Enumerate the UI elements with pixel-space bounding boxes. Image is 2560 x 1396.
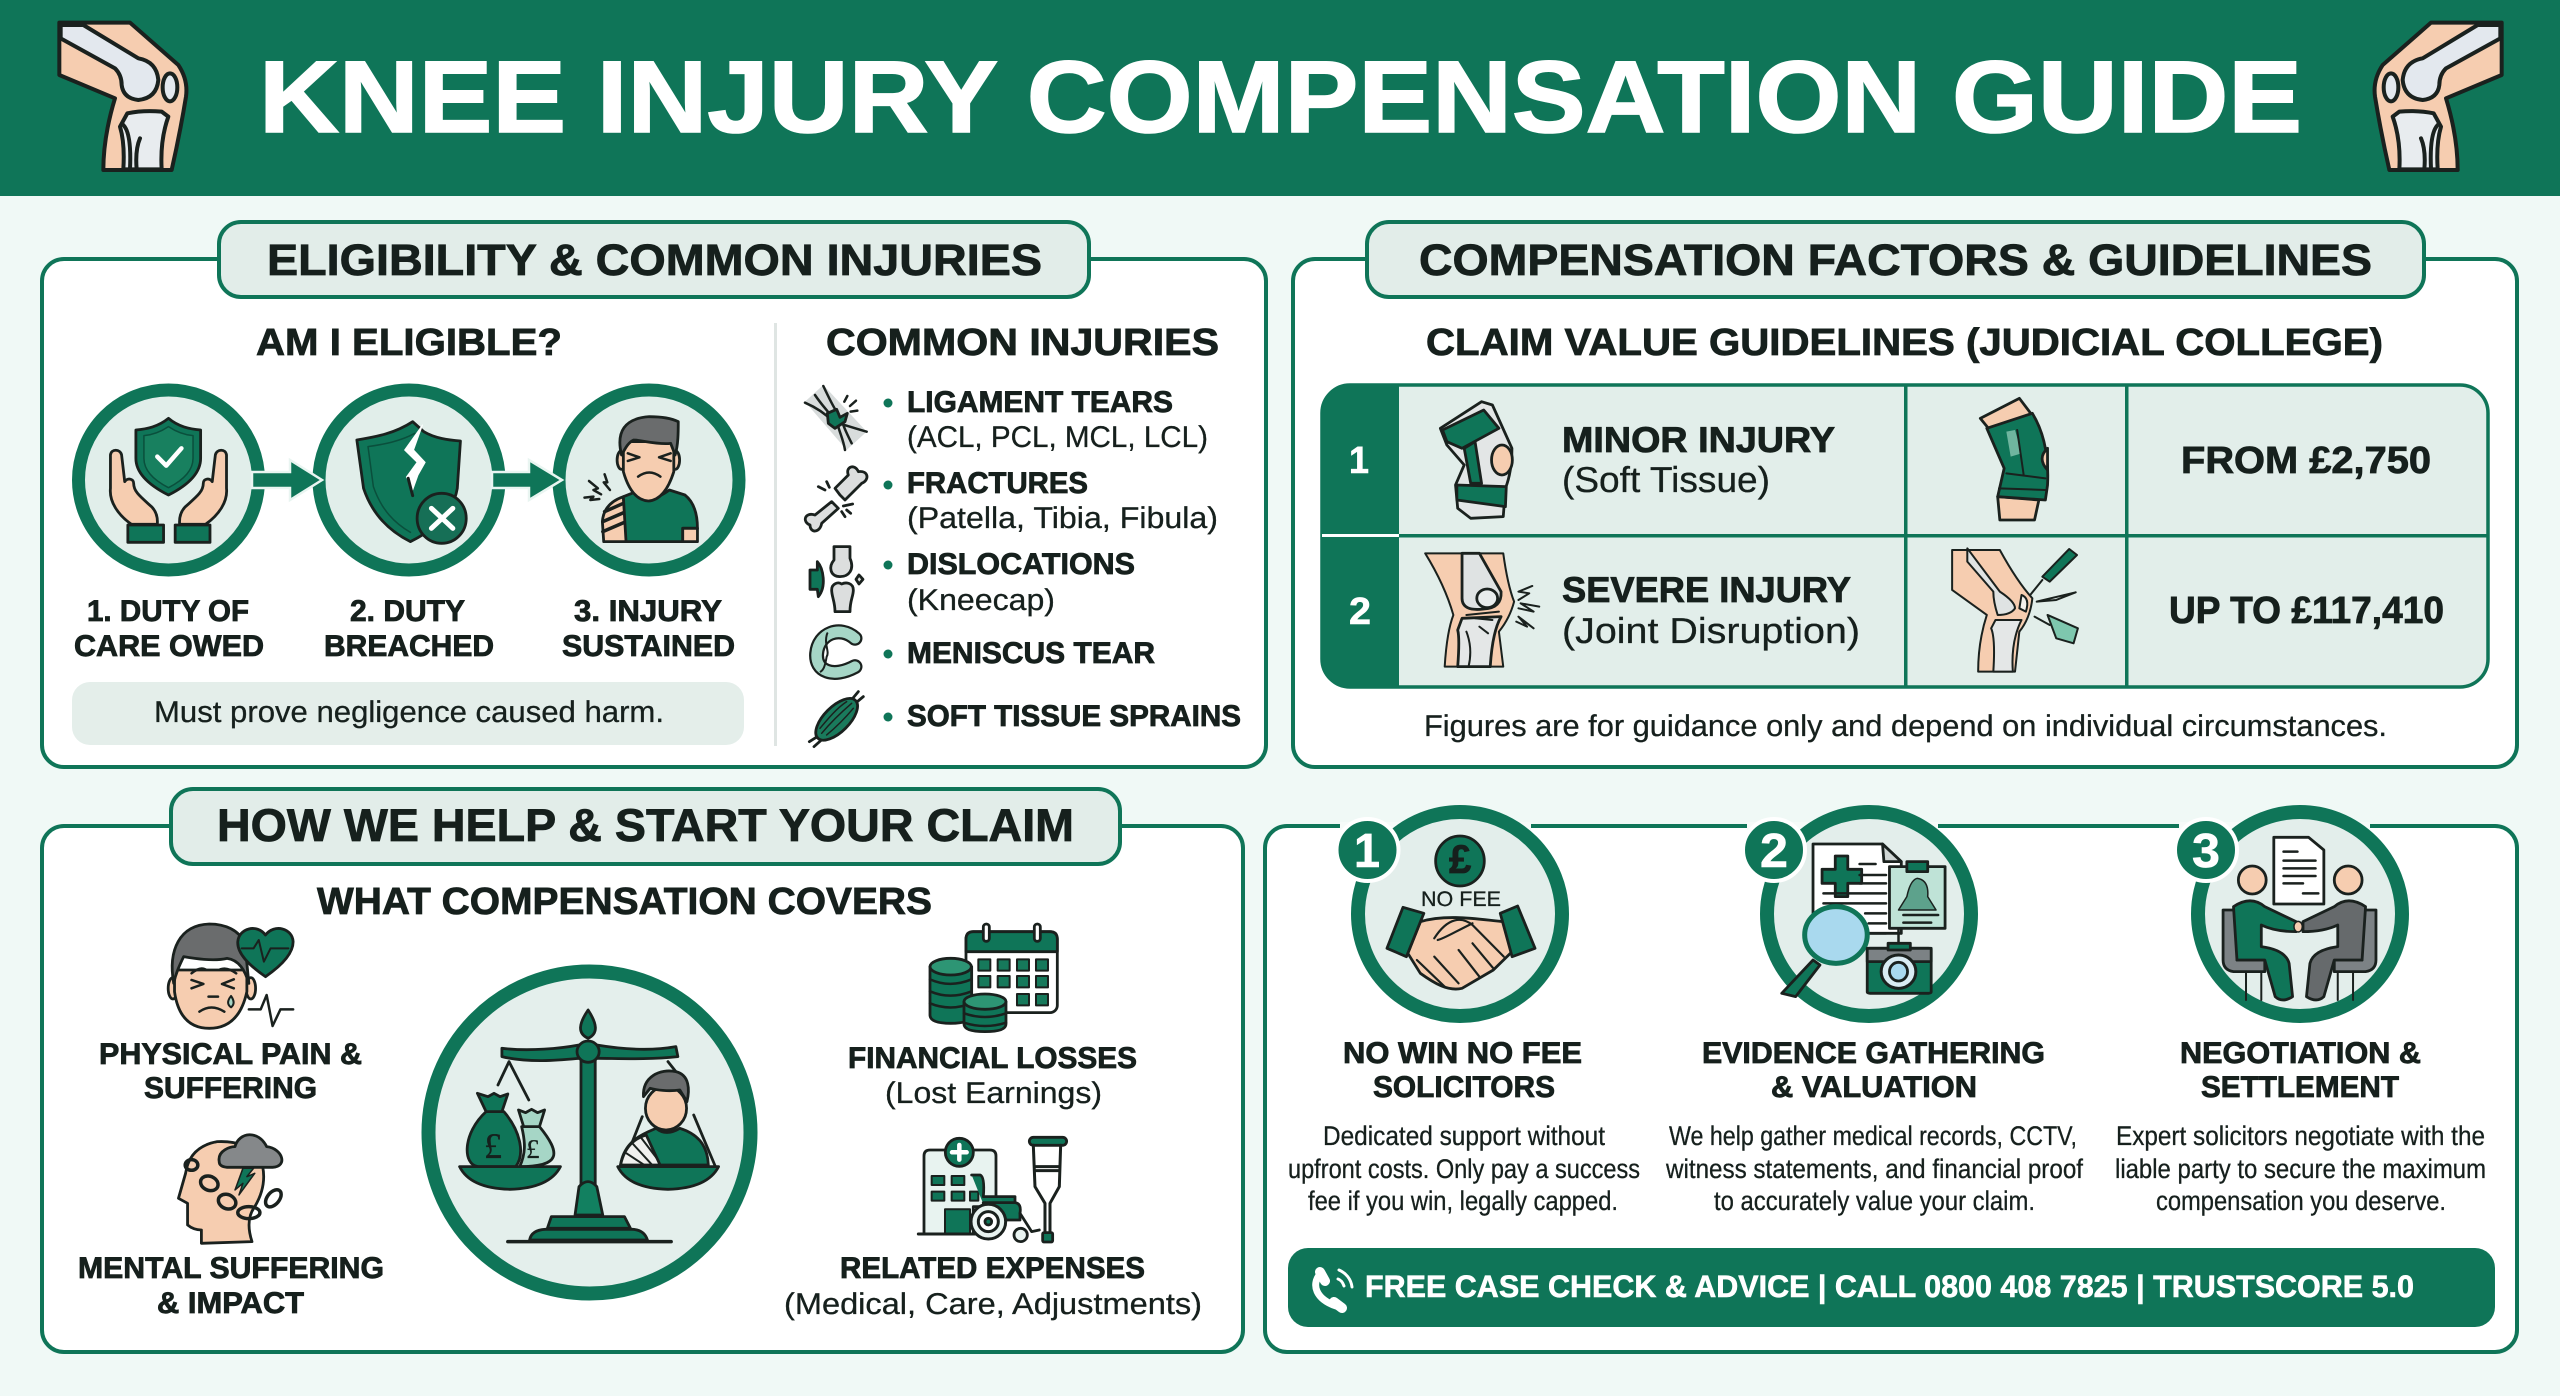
text: pound coin: £ bbox=[1449, 838, 1471, 882]
heading: evidence gathering: EVIDENCE GATHERING bbox=[1702, 1037, 2045, 1070]
icon: face in pain with heart bbox=[168, 924, 293, 1028]
icon: knee joint right bbox=[2375, 23, 2502, 170]
text: step 1 description: upfront costs. Only pay a success bbox=[1288, 1154, 1640, 1184]
heading: negotiation and settlement: SETTLEMENT bbox=[2201, 1071, 2399, 1104]
heading: negotiation and settlement: NEGOTIATION & bbox=[2180, 1037, 2421, 1070]
value: up to 117,410: UP TO £117,410 bbox=[2169, 590, 2444, 632]
panel heading tab bbox=[1367, 222, 2424, 297]
panel heading tab: COMPENSATION FACTORS & GUIDELINES bbox=[1419, 236, 2372, 285]
icon: dislocated kneecap bbox=[810, 547, 863, 612]
step circles and arrows bbox=[78, 390, 739, 570]
text: soft tissue sprains: SOFT TISSUE SPRAINS bbox=[907, 700, 1241, 733]
value: from 2,750: FROM £2,750 bbox=[2181, 440, 2431, 482]
label: related expenses: RELATED EXPENSES bbox=[840, 1252, 1145, 1285]
heading: no win no fee solicitors: NO WIN NO FEE bbox=[1343, 1037, 1582, 1070]
panel heading tab bbox=[219, 222, 1089, 297]
icon: calendar and coins bbox=[930, 924, 1057, 1032]
panel: what compensation covers bbox=[42, 789, 1243, 1352]
label: financial losses: (Lost Earnings) bbox=[885, 1077, 1102, 1110]
panel: eligibility and common injuries bbox=[42, 222, 1266, 767]
label: step 1: 1. DUTY OF bbox=[87, 595, 249, 628]
step circle bbox=[1358, 812, 1562, 1016]
text: severe injury bbox=[1562, 569, 1860, 651]
title: KNEE INJURY COMPENSATION GUIDE bbox=[259, 40, 2302, 154]
callout: negligence note: Must prove negligence caused harm. bbox=[154, 696, 664, 729]
heading: claim value guidelines: CLAIM VALUE GUIDELINES (JUDICIAL COLLEGE) bbox=[1426, 322, 2383, 364]
label: step 2: 2. DUTY bbox=[350, 595, 465, 628]
label: step 3: SUSTAINED bbox=[562, 630, 735, 663]
arrow: step 1 to 2 bbox=[252, 460, 322, 500]
call to action bar bbox=[1288, 1248, 2495, 1327]
text: minor injury bbox=[1562, 419, 1835, 500]
step circle bbox=[1767, 812, 1971, 1016]
icon: knee joint left bbox=[59, 23, 186, 170]
label: step 2 bbox=[324, 595, 494, 663]
number badge 3: 3 bbox=[2192, 825, 2220, 878]
pound sign small: £ bbox=[526, 1134, 540, 1164]
icon: muscle bbox=[809, 691, 864, 747]
label: related expenses bbox=[784, 1252, 1202, 1321]
label: mental suffering: & IMPACT bbox=[157, 1287, 304, 1320]
heading: what compensation covers: WHAT COMPENSATION COVERS bbox=[317, 881, 932, 923]
icon: phone bbox=[1316, 1270, 1352, 1308]
icon: documents magnifier camera bbox=[1782, 844, 1945, 997]
text: minor injury: (Soft Tissue) bbox=[1562, 459, 1770, 500]
icon: hospital wheelchair crutch bbox=[918, 1137, 1067, 1242]
panel heading tab: HOW WE HELP & START YOUR CLAIM bbox=[217, 799, 1074, 851]
text: severe injury: (Joint Disruption) bbox=[1562, 610, 1860, 651]
heading: no win no fee solicitors: SOLICITORS bbox=[1373, 1071, 1555, 1104]
label: physical pain bbox=[99, 1038, 362, 1105]
panel: start your claim steps bbox=[1265, 812, 2517, 1352]
label: mental suffering: MENTAL SUFFERING bbox=[78, 1252, 384, 1285]
arrow: step 2 to 3 bbox=[492, 460, 562, 500]
heading: negotiation and settlement bbox=[2180, 1037, 2421, 1104]
text: step 3 description bbox=[2115, 1121, 2486, 1216]
label: physical pain: SUFFERING bbox=[144, 1072, 317, 1105]
label: step 1 bbox=[74, 595, 264, 663]
icon: handshake and coin bbox=[1387, 836, 1535, 989]
text: step 1 description bbox=[1288, 1121, 1640, 1216]
text: fractures: (Patella, Tibia, Fibula) bbox=[907, 502, 1218, 535]
heading: common injuries: COMMON INJURIES bbox=[826, 322, 1219, 364]
label: financial losses: FINANCIAL LOSSES bbox=[848, 1042, 1137, 1075]
table: claim values bbox=[1322, 385, 2488, 687]
label: related expenses: (Medical, Care, Adjustments) bbox=[784, 1288, 1202, 1321]
icon: head with chain and storm cloud bbox=[178, 1135, 284, 1243]
callout: negligence note bbox=[72, 682, 744, 745]
pound sign large: £ bbox=[484, 1126, 502, 1166]
icon: broken shield bbox=[357, 422, 466, 543]
step circle bbox=[2198, 812, 2402, 1016]
text: dislocations: (Kneecap) bbox=[907, 584, 1055, 617]
panel heading tab: ELIGIBILITY & COMMON INJURIES bbox=[267, 236, 1042, 285]
label: step 2: BREACHED bbox=[324, 630, 494, 663]
icon: knee brace front bbox=[1440, 402, 1512, 518]
icon: injured person bbox=[585, 417, 697, 542]
number badge 1 bbox=[1336, 819, 1398, 881]
text: ligament tears bbox=[884, 386, 1208, 454]
step 2: evidence gathering bbox=[1665, 812, 2083, 1216]
text: call to action: FREE CASE CHECK & ADVICE | CALL 0800 408 7825 | TRUSTSCORE 5.0 bbox=[1365, 1269, 2414, 1304]
text: severe injury: SEVERE INJURY bbox=[1562, 569, 1851, 610]
text: step 1 description: fee if you win, legally capped. bbox=[1308, 1186, 1618, 1216]
step 1 circle bbox=[78, 390, 258, 570]
text: step 2 description: to accurately value your claim. bbox=[1714, 1186, 2035, 1216]
icon: meniscus bbox=[817, 632, 855, 672]
step 3: negotiation and settlement bbox=[2115, 812, 2486, 1216]
icon: fractured bone bbox=[805, 467, 867, 531]
number badge 2 bbox=[1743, 819, 1805, 881]
label: step 3: 3. INJURY bbox=[574, 595, 722, 628]
list: common injuries bbox=[805, 385, 1241, 747]
central scales of justice bbox=[428, 972, 750, 1294]
text: ligament tears: LIGAMENT TEARS bbox=[907, 386, 1173, 419]
heading: evidence gathering: & VALUATION bbox=[1771, 1071, 1977, 1104]
step 3 circle bbox=[559, 390, 739, 570]
icon: knee surgery bbox=[1952, 548, 2078, 672]
panel heading tab bbox=[171, 789, 1120, 864]
text: minor injury: MINOR INJURY bbox=[1562, 419, 1835, 460]
text: fractures: FRACTURES bbox=[907, 467, 1088, 500]
text: dislocations: DISLOCATIONS bbox=[907, 548, 1135, 581]
text: meniscus tear: MENISCUS TEAR bbox=[907, 637, 1155, 670]
header banner bbox=[0, 0, 2560, 196]
icon: severe knee injury bbox=[1425, 553, 1539, 667]
text: step 3 description: Expert solicitors negotiate with the bbox=[2116, 1121, 2485, 1151]
heading: am I eligible: AM I ELIGIBLE? bbox=[256, 322, 562, 364]
icon: ligament tear bbox=[805, 385, 867, 450]
icon: knee brace side bbox=[1980, 398, 2048, 520]
panel: compensation factors and guidelines bbox=[1293, 222, 2517, 767]
heading: evidence gathering bbox=[1702, 1037, 2045, 1104]
number badge 1: 1 bbox=[1354, 825, 1380, 878]
number badge 3 bbox=[2175, 819, 2237, 881]
text: dislocations bbox=[884, 548, 1135, 617]
heading: no win no fee solicitors bbox=[1343, 1037, 1582, 1104]
text: step 2 description: witness statements, and financial proof bbox=[1665, 1154, 2083, 1184]
step labels bbox=[74, 595, 735, 663]
row number 2: 2 bbox=[1349, 591, 1371, 633]
text: step 3 description: compensation you deserve. bbox=[2156, 1186, 2446, 1216]
text: no fee: NO FEE bbox=[1421, 888, 1501, 911]
icon: shield in caring hands bbox=[110, 418, 227, 542]
icon: scales bbox=[460, 1010, 719, 1242]
text: step 3 description: liable party to secure the maximum bbox=[2115, 1154, 2486, 1184]
text: ligament tears: (ACL, PCL, MCL, LCL) bbox=[907, 421, 1208, 454]
label: mental suffering bbox=[78, 1252, 384, 1320]
label: physical pain: PHYSICAL PAIN & bbox=[99, 1038, 362, 1071]
label: financial losses bbox=[848, 1042, 1137, 1110]
circle background bbox=[428, 972, 750, 1294]
text: step 2 description: We help gather medical records, CCTV, bbox=[1669, 1121, 2077, 1151]
text: fractures bbox=[884, 467, 1218, 535]
icon: two people shaking hands over a document bbox=[2223, 837, 2376, 1000]
step 1: no win no fee bbox=[1288, 812, 1640, 1216]
text: step 1 description: Dedicated support without bbox=[1323, 1121, 1605, 1151]
row number 1: 1 bbox=[1349, 440, 1369, 482]
number badge 2: 2 bbox=[1760, 825, 1788, 878]
label: step 3 bbox=[562, 595, 735, 663]
note: figures guidance: Figures are for guidance only and depend on individual circumstances. bbox=[1424, 710, 2387, 743]
text: step 2 description bbox=[1665, 1121, 2083, 1216]
label: step 1: CARE OWED bbox=[74, 630, 264, 663]
step 2 circle bbox=[319, 390, 499, 570]
